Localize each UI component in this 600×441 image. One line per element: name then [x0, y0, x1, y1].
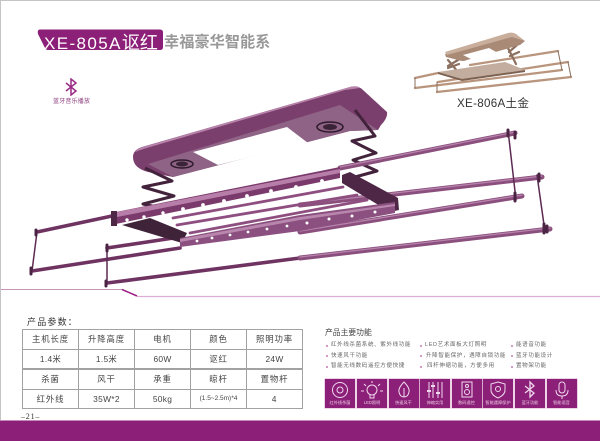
features list: 能语音功能	[516, 342, 547, 348]
icon tile: bluetooth	[515, 379, 545, 408]
parameters table 1: 讴红	[209, 354, 228, 364]
parameters table 1: 60W	[153, 354, 172, 364]
icon tile: fast air drying	[388, 379, 418, 408]
rack underside and side bracket	[122, 172, 399, 243]
icon tile: LED lighting: LED照明	[364, 400, 380, 405]
parameters table 2: 置物杆	[261, 374, 288, 384]
parameters table 1: 照明功率	[256, 334, 293, 344]
icon tile: obstacle protection	[483, 379, 513, 408]
features heading: 产品主要功能	[325, 328, 372, 337]
features list	[326, 341, 553, 369]
parameters table 2: 4	[272, 394, 277, 404]
icon tile: fast air drying: 快速风干	[395, 400, 412, 405]
icon tile: smart voice: 智能语音	[553, 400, 570, 405]
icon tile: obstacle protection: 智能遇障保护	[485, 400, 511, 405]
icon tile: infrared sterilization: 红外线杀菌	[330, 400, 350, 405]
scissor lift arms	[143, 110, 377, 210]
icon: bluetooth	[66, 78, 78, 96]
icon tile: bluetooth: 蓝牙功能	[522, 400, 538, 405]
icon tile: LED lighting	[357, 379, 387, 408]
parameters table 2	[22, 369, 303, 409]
parameters table 1: 24W	[265, 354, 284, 364]
parameters table 1: 颜色	[209, 334, 228, 344]
small product image: XE-806A	[414, 32, 572, 94]
parameters table 2: 红外线	[37, 394, 64, 404]
footer band	[0, 420, 600, 441]
features list: 智能无线数码遥控方便快捷	[331, 363, 405, 369]
main product image: XE-805A clothes rack	[1, 86, 600, 298]
icon tile: digital remote: 数码遥控	[458, 400, 475, 405]
icon tile: smart voice	[546, 379, 576, 408]
title badge	[38, 30, 163, 50]
baseline rule	[1, 290, 600, 296]
extended rods	[31, 130, 550, 286]
icon tile: telescopic	[420, 379, 450, 408]
parameters table 2: 杀菌	[41, 374, 60, 384]
parameters table 1: 主机长度	[32, 334, 69, 344]
features list: 置物架功能	[516, 363, 547, 369]
features list: 四杆伸缩功能，方便多用	[427, 363, 495, 369]
icon tile: infrared sterilization	[325, 379, 355, 408]
parameters table 1: 升降高度	[88, 334, 125, 344]
parameters table 2: (1.5~2.5m)*4	[200, 395, 237, 402]
features list: 红外线杀菌系统、紫外线功能	[331, 342, 411, 348]
parameters heading: 产品参数：	[27, 317, 78, 327]
rack rear beam	[180, 202, 395, 247]
icon tile: telescopic: 伸缩实用	[427, 400, 443, 405]
parameters table 1: 1.4米	[40, 354, 61, 364]
parameters table 1	[22, 329, 303, 369]
icon tile: digital remote	[452, 379, 482, 408]
parameters table 2: 50kg	[153, 394, 172, 404]
features list: 蓝牙功能设计	[516, 352, 553, 358]
features list: 快速风干功能	[331, 352, 368, 358]
page number: –21–	[21, 412, 40, 420]
ceiling unit	[133, 86, 387, 177]
title: series name: 幸福豪华智能系	[164, 34, 270, 51]
parameters table 2: 35W*2	[93, 394, 120, 404]
parameters table 2: 风干	[97, 374, 116, 384]
parameters table 1: 电机	[153, 334, 172, 344]
title: model name: XE-805A讴红	[44, 32, 158, 52]
features list: 升降智能保护，遇障自锁功能	[426, 352, 506, 358]
bluetooth caption: 蓝牙音乐播放	[53, 99, 90, 105]
parameters table 1: 1.5米	[96, 354, 117, 364]
parameters table 2: 晾杆	[209, 374, 228, 384]
parameters table 2: 承重	[153, 374, 172, 384]
features list: LED艺术面板大灯照明	[425, 342, 487, 348]
small product label: XE-806A土金	[457, 97, 529, 110]
rack front beam	[111, 167, 340, 226]
